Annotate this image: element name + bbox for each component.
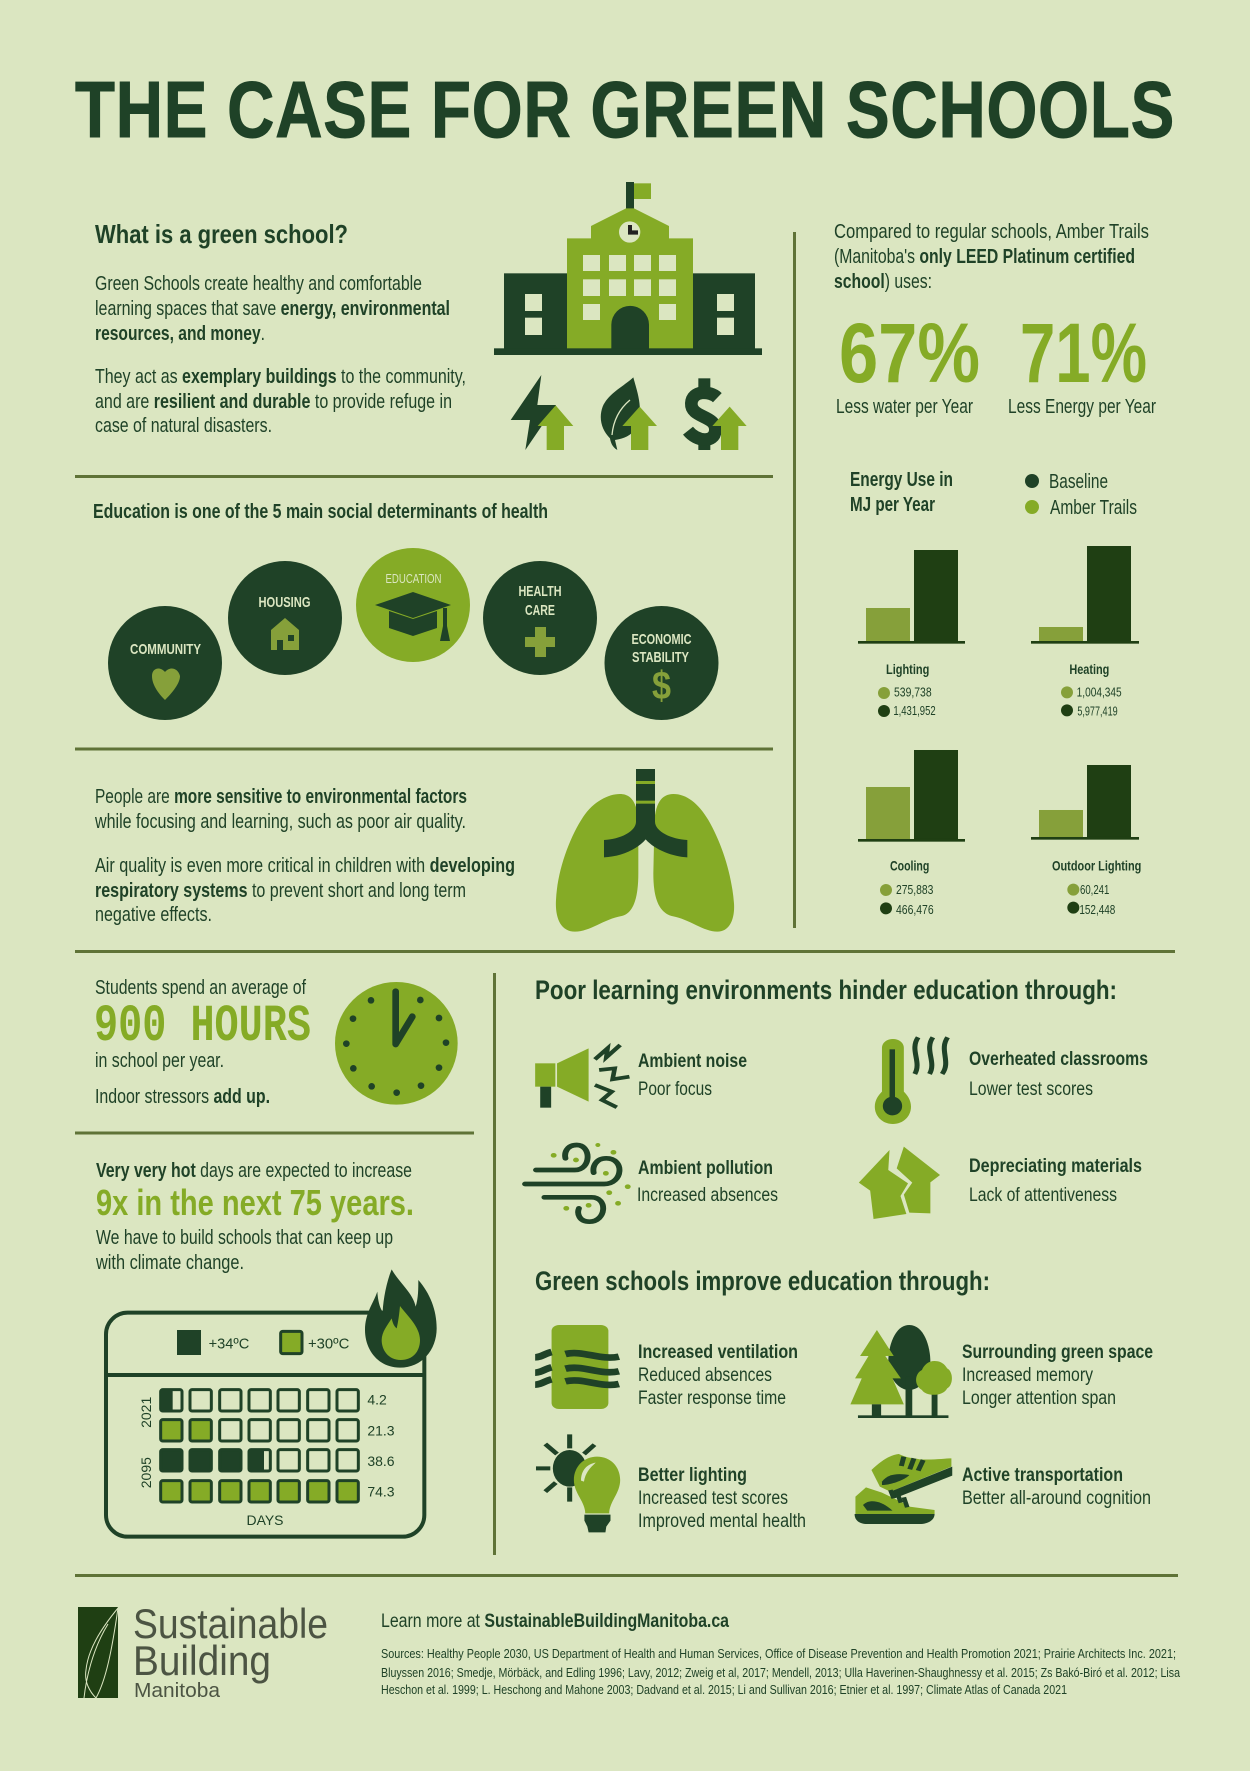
panel: what is a green school (95, 182, 762, 450)
bar chart: lighting: 539,738 (894, 686, 932, 700)
bar chart: lighting (858, 550, 965, 718)
logo: sustainable building manitoba: Sustainable (133, 1600, 328, 1647)
item: overheated classrooms (875, 1037, 1148, 1124)
text block: air quality (94, 786, 515, 926)
icon: money up (688, 378, 747, 450)
bar chart: heating: 5,977,419 (1077, 705, 1118, 719)
item: active transportation: Better all-around cognition (962, 1488, 1151, 1509)
panel: very hot days (95, 1160, 437, 1537)
text block: green school definition: and are resilient and durable to provide refuge in (95, 391, 452, 413)
heading: energy use: Energy Use in (850, 469, 953, 491)
item: surrounding green space: Surrounding green space (962, 1342, 1153, 1363)
icon: energy up (511, 375, 573, 450)
item: increased ventilation: Faster response time (638, 1388, 786, 1409)
bar chart: outdoor lighting: 152,448 (1079, 903, 1115, 917)
item: better lighting: Better lighting (638, 1465, 747, 1486)
text block: learn more: Learn more at SustainableBuildingManitoba.ca (381, 1611, 729, 1632)
item: overheated classrooms: Lower test scores (969, 1079, 1093, 1100)
labels: calendar values: 4.2 (367, 1392, 387, 1408)
item: overheated classrooms: Overheated classrooms (969, 1049, 1148, 1070)
text block: green school definition (95, 273, 466, 437)
bar chart: outdoor lighting: Outdoor Lighting (1052, 858, 1141, 874)
item: better lighting: Improved mental health (638, 1511, 806, 1532)
item: ambient pollution: Increased absences (637, 1185, 778, 1206)
stat: 9x in the next 75 years: 9x in the next 75 years. (96, 1182, 414, 1223)
legend: Amber Trails (1050, 497, 1137, 519)
bar chart: cooling: Cooling (890, 858, 929, 874)
text block: sources (381, 1647, 1180, 1697)
bar chart: lighting: 1,431,952 (893, 704, 936, 718)
text block: indoor stressors: Indoor stressors add up. (95, 1086, 270, 1108)
bar chart: cooling: 466,476 (896, 903, 934, 917)
panel: poor learning environments (525, 975, 1148, 1222)
heading: poor learning environments: Poor learning environments hinder education through: (535, 975, 1117, 1005)
circle: health care (483, 561, 597, 675)
legend: temperature (177, 1330, 350, 1355)
heading: green schools improve: Green schools improve education through: (535, 1266, 990, 1296)
text block: green school definition: learning spaces that save energy, environmental (95, 298, 450, 320)
item: increased ventilation (535, 1325, 798, 1409)
icon: sun and lightbulb (536, 1434, 620, 1532)
circle: housing (228, 561, 342, 675)
item: ambient pollution (525, 1143, 778, 1222)
labels: calendar values: 21.3 (367, 1423, 395, 1439)
text block: green school definition: resources, and money. (95, 323, 265, 345)
legend: temperature: +30ºC (308, 1336, 350, 1352)
legend: temperature: +34ºC (209, 1336, 250, 1352)
heading: what is a green school: What is a green school? (95, 219, 348, 249)
item: increased ventilation: Increased ventilation (638, 1342, 798, 1363)
legend: Baseline (1049, 471, 1108, 493)
icon: clock (335, 982, 458, 1105)
item: better lighting (536, 1434, 806, 1532)
item: depreciating materials (859, 1147, 1142, 1219)
item: depreciating materials: Lack of attentiveness (969, 1185, 1117, 1206)
text block: climate change: with climate change. (95, 1252, 244, 1274)
footer (78, 1600, 1180, 1702)
text block: in school per year: in school per year. (95, 1050, 224, 1072)
bar chart: outdoor lighting (1031, 765, 1141, 917)
text block: sources: Heschon et al. 1999; L. Heschong and Mahone 2003; Dadvand et al. 2015; Li and Sullivan 2016; Etnier et al. 1997; Climate Atlas of Canada 2021 (381, 1683, 1067, 1697)
icon: trees (850, 1325, 952, 1418)
icon: thermometer (875, 1037, 948, 1124)
panel: amber trails comparison (834, 221, 1156, 917)
panel: 900 hours (94, 977, 458, 1108)
text block: green school definition: Green Schools create healthy and comfortable (95, 273, 422, 295)
icon: flame (365, 1269, 437, 1368)
text block: students spend: Students spend an average of (95, 977, 306, 999)
circle: community (108, 606, 222, 720)
item: ambient noise: Poor focus (638, 1079, 712, 1100)
circle: community: COMMUNITY (130, 641, 201, 658)
text block: green school definition: They act as exemplary buildings to the community, (95, 366, 466, 388)
text block: amber trails intro: Compared to regular schools, Amber Trails (834, 221, 1149, 243)
panel: green schools improve education (535, 1266, 1153, 1532)
item: better lighting: Increased test scores (638, 1488, 788, 1509)
item: ambient noise: Ambient noise (638, 1051, 747, 1072)
circle: economic stability: STABILITY (632, 649, 689, 666)
item: depreciating materials: Depreciating materials (969, 1156, 1142, 1177)
stat: 900 hours: 900 HOURS (94, 997, 311, 1056)
text block: air quality: negative effects. (95, 904, 212, 926)
text block: amber trails intro: (Manitoba's only LEED Platinum certified (834, 246, 1135, 268)
heading: education determinant: Education is one of the 5 main social determinants of health (93, 501, 548, 523)
panel: air quality (94, 769, 734, 932)
text block: amber trails intro: school) uses: (834, 271, 932, 293)
circle: economic stability (604, 606, 718, 720)
stat: 67% less water: Less water per Year (836, 396, 973, 418)
logo: sustainable building manitoba: Building (133, 1637, 271, 1684)
icon: school building (494, 182, 762, 355)
text block: climate change: We have to build schools that can keep up (96, 1227, 393, 1249)
circle: economic stability: $ (652, 664, 671, 708)
labels: calendar values: 2095 (138, 1457, 154, 1488)
logo: sustainable building manitoba: Manitoba (134, 1680, 221, 1702)
icon: wind and particles (525, 1143, 631, 1222)
legend (1025, 471, 1137, 519)
circle: health care: CARE (525, 602, 555, 619)
circle: housing: HOUSING (258, 594, 310, 611)
icon: environment up (601, 377, 657, 450)
item: surrounding green space: Increased memory (962, 1365, 1093, 1386)
circle: education: EDUCATION (386, 571, 442, 586)
circle: health care: HEALTH (518, 583, 562, 600)
circle: education (356, 548, 470, 662)
bar chart: heating: Heating (1069, 661, 1109, 677)
text block: amber trails intro (834, 221, 1149, 293)
text block: air quality: People are more sensitive to environmental factors (95, 786, 467, 808)
stat: 67% less water: 67% (839, 306, 980, 400)
labels: calendar values (138, 1392, 395, 1528)
chart: calendar of hot days (106, 1313, 424, 1537)
item: surrounding green space: Longer attention span (962, 1388, 1116, 1409)
item: ambient noise (535, 1045, 747, 1108)
bar chart: heating (1031, 546, 1139, 719)
item: active transportation (855, 1454, 1151, 1524)
icon: ventilation (535, 1325, 619, 1409)
stat: 71% less energy: 71% (1020, 306, 1147, 400)
text block: air quality: while focusing and learning, such as poor air quality. (94, 811, 466, 833)
icon: lungs (556, 769, 734, 932)
bar chart: outdoor lighting: 60,241 (1080, 883, 1109, 897)
icon: cracked house (859, 1147, 940, 1219)
item: surrounding green space (850, 1325, 1153, 1418)
icon: megaphone (535, 1045, 629, 1108)
stat: 71% less energy: Less Energy per Year (1008, 396, 1156, 418)
text block: air quality: Air quality is even more critical in children with developing (95, 855, 515, 877)
heading: energy use: MJ per Year (850, 494, 935, 516)
icon: running shoes (855, 1454, 952, 1524)
grid: days per year (161, 1390, 358, 1502)
bar chart: cooling (858, 750, 965, 917)
text block: climate change (95, 1227, 393, 1274)
text block: green school definition: case of natural disasters. (95, 415, 272, 437)
logo: sustainable building manitoba (78, 1600, 328, 1702)
text block: very hot days: Very very hot days are expected to increase (96, 1160, 412, 1182)
bar chart: heating: 1,004,345 (1077, 686, 1122, 700)
text block: air quality: respiratory systems to prevent short and long term (95, 880, 466, 902)
bar chart: lighting: Lighting (886, 661, 929, 677)
labels: calendar values: DAYS (246, 1512, 284, 1528)
labels: calendar values: 2021 (138, 1397, 154, 1428)
item: ambient pollution: Ambient pollution (638, 1158, 773, 1179)
item: active transportation: Active transportation (962, 1465, 1123, 1486)
stat: 71% less energy (1008, 306, 1156, 418)
bar chart: cooling: 275,883 (896, 883, 933, 897)
panel: social determinants of health (93, 501, 718, 720)
labels: calendar values: 38.6 (367, 1453, 395, 1469)
labels: calendar values: 74.3 (367, 1484, 395, 1500)
item: increased ventilation: Reduced absences (638, 1365, 772, 1386)
circle: economic stability: ECONOMIC (632, 631, 692, 648)
heading: energy use (850, 469, 953, 516)
